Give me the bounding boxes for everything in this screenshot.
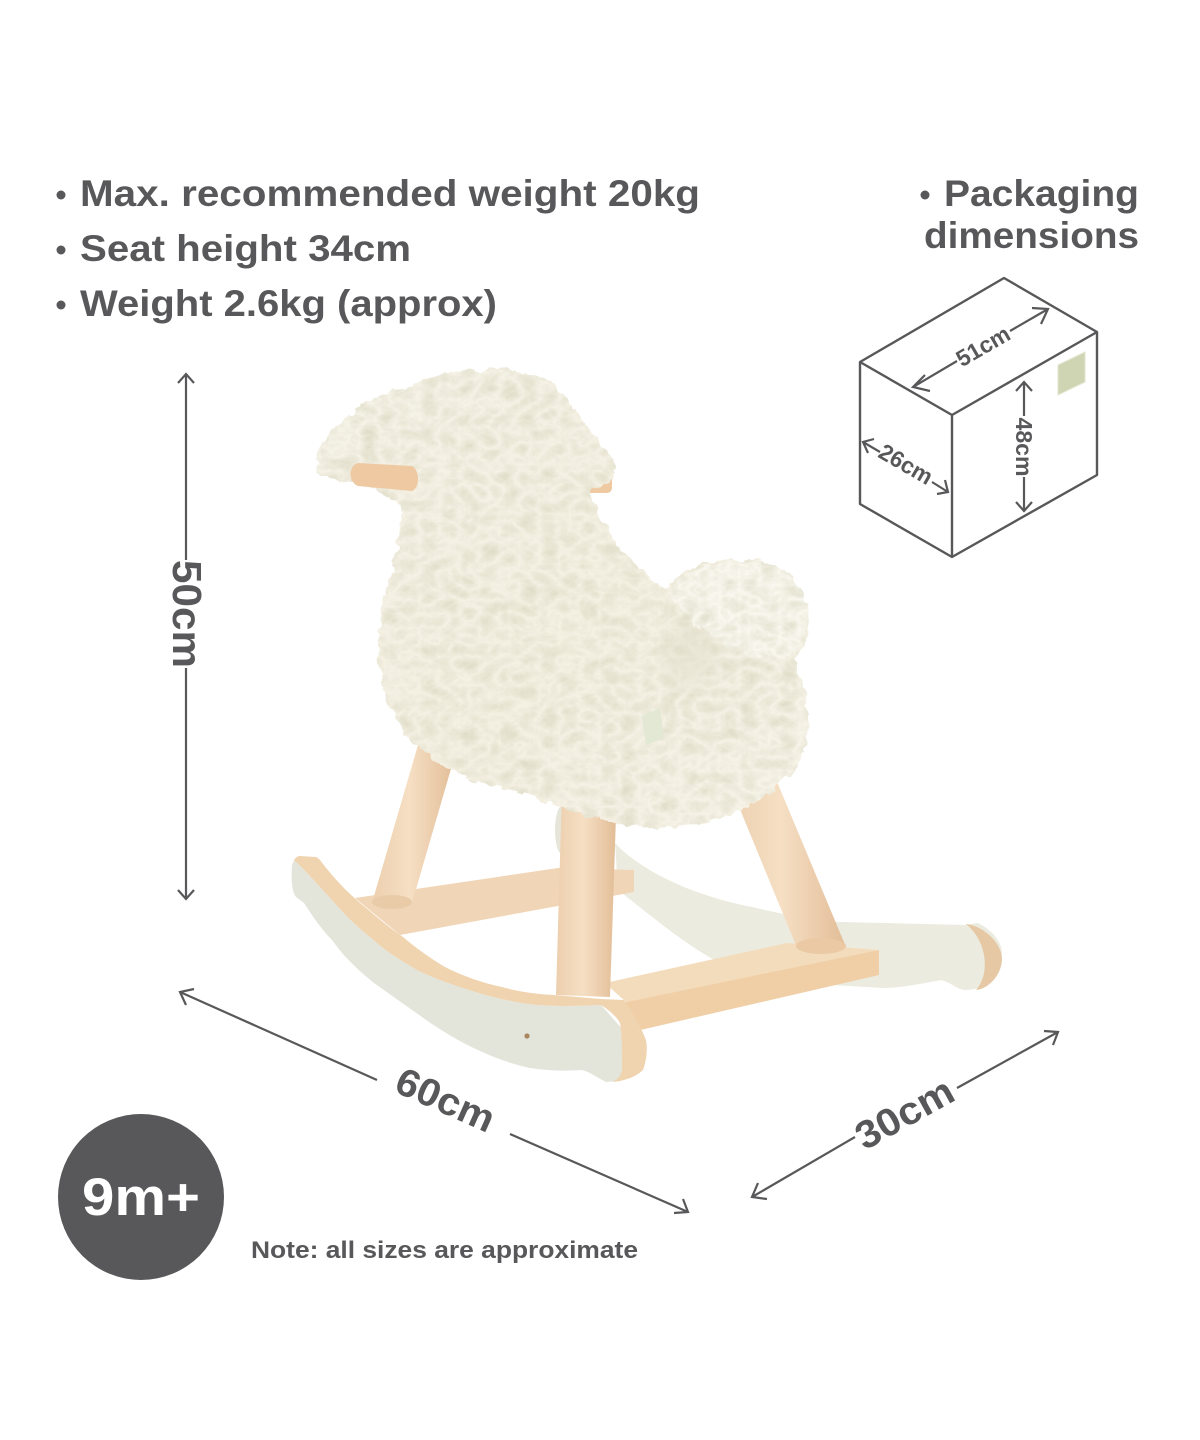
back rocker: [615, 843, 1002, 990]
front middle leg: [556, 790, 616, 997]
arrow: box width 26cm: 26cm: [874, 438, 938, 490]
feature list: [56, 173, 700, 324]
age badge 9m+: [58, 1114, 224, 1280]
rocker plywood edge: [294, 856, 647, 1082]
note text: Note: all sizes are approximate: [251, 1237, 638, 1264]
fabric tag: [642, 708, 664, 745]
front crossbar: [605, 943, 879, 1031]
rocking sheep product image: [292, 369, 1002, 1082]
back crossbar: [355, 868, 634, 935]
stamp label: [1058, 352, 1085, 395]
rocker grey face: [292, 860, 632, 1082]
arrow: height 50cm: 50cm: [164, 560, 210, 668]
tail shadow: [660, 621, 720, 689]
packaging box diagram: [860, 278, 1097, 557]
eye: [586, 449, 610, 471]
front rocker: [292, 856, 647, 1082]
arrow: length 60cm: [180, 989, 688, 1213]
packaging heading: Packaging: [944, 173, 1139, 214]
arrow: box height 48cm: [1011, 382, 1037, 511]
arrow: box height 48cm: 48cm: [1011, 417, 1037, 477]
back rocker edge: [966, 924, 1002, 990]
packaging heading: dimensions: [924, 215, 1139, 256]
age badge 9m+: 9m+: [82, 1168, 200, 1227]
arrow: length 60cm: 60cm: [389, 1060, 501, 1141]
arrow: width 30cm: [752, 1031, 1058, 1199]
box outline: [860, 278, 1097, 557]
feature: product weight: Weight 2.6kg (approx): [80, 283, 497, 324]
arrow: height 50cm: [164, 374, 210, 899]
feature: seat height: Seat height 34cm: [80, 228, 411, 269]
arrow: width 30cm: 30cm: [848, 1070, 962, 1159]
fleece tail: [668, 561, 807, 659]
feature: max weight: Max. recommended weight 20kg: [80, 173, 700, 214]
arrow: box length 51cm: 51cm: [951, 320, 1015, 372]
seat shadow disc: [555, 806, 569, 854]
handle dowel right: [585, 470, 612, 493]
fleece body: [316, 369, 809, 828]
handle dowel left: [350, 463, 418, 491]
back left leg: [372, 745, 455, 909]
rocker bolt: [524, 1033, 530, 1039]
arrow: box length 51cm: [913, 308, 1048, 391]
packaging heading: [920, 173, 1139, 256]
back right leg: [728, 765, 846, 954]
